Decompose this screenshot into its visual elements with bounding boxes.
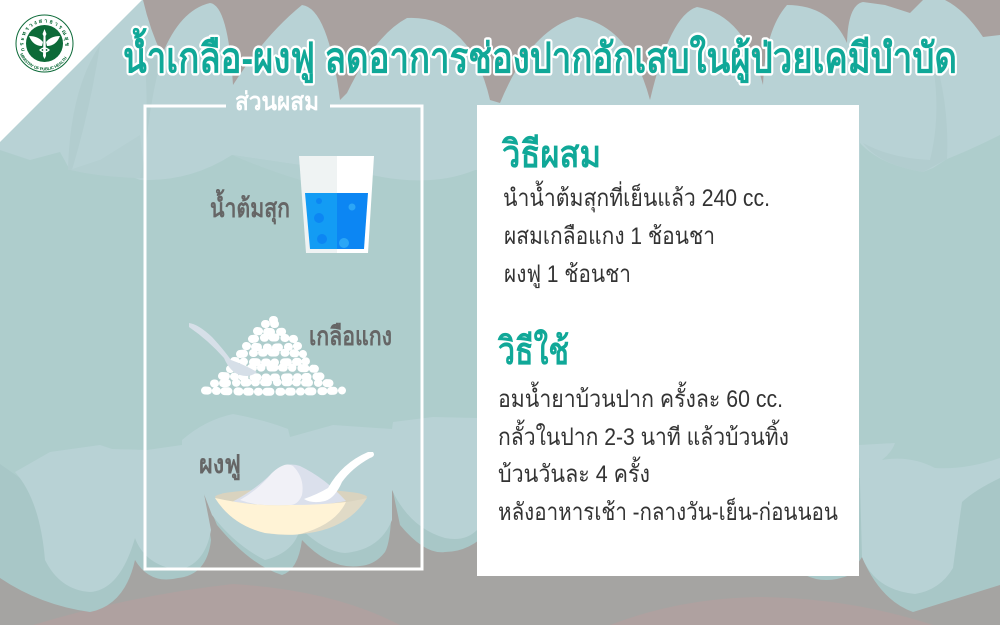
text: usage steps: บ้วนวันละ 4 ครั้ง: [498, 456, 650, 488]
panel: ingredients frame: [145, 106, 422, 569]
text: mixing steps: [503, 180, 770, 289]
background: lower teeth: [15, 414, 1000, 594]
background: tongue: [33, 584, 933, 625]
text: mixing steps: นำน้ำต้มสุกที่เย็นแล้ว 240 cc.: [503, 180, 770, 213]
icon: glass of water: [299, 156, 374, 253]
background: lower gum: [0, 480, 1000, 625]
heading: how to mix: วิธีผสม: [501, 134, 601, 176]
icon: bowl of baking soda with spoon: [215, 452, 374, 535]
text: usage steps: หลังอาหารเช้า -กลางวัน-เย็น-ก่อนนอน: [498, 497, 838, 526]
panel: instructions card: [477, 105, 859, 576]
text: mixing steps: ผงฟู 1 ช้อนชา: [504, 261, 631, 289]
label: table salt: เกลือแกง: [309, 321, 392, 351]
logo: Ministry of Public Health seal: MINISTRY OF PUBLIC HEALTH: [20, 53, 67, 70]
background: upper teeth: [0, 0, 1000, 190]
text: usage steps: กลั้วในปาก 2-3 นาที แล้วบ้วนทิ้ง: [498, 419, 789, 451]
text: usage steps: อมน้ำยาบ้วนปาก ครั้งละ 60 cc.: [498, 381, 783, 413]
label: boiled water: น้ำต้มสุก: [210, 188, 290, 225]
text: usage steps: [498, 381, 838, 526]
logo: Ministry of Public Health seal: [16, 14, 74, 72]
heading: how to use: วิธีใช้: [497, 329, 569, 373]
label: baking soda: ผงฟู: [199, 449, 241, 481]
logo: Ministry of Public Health seal: กระทรวงสาธารณสุข: [20, 19, 69, 52]
corner triangle: [0, 0, 142, 142]
background: upper gum: [0, 0, 1000, 110]
text: mixing steps: ผสมเกลือแกง 1 ช้อนชา: [504, 223, 715, 250]
heading: ingredients: ส่วนผสม: [235, 88, 319, 116]
icon: salt pile with spoon: [189, 320, 342, 392]
background: lower teeth shadow: [0, 464, 1000, 612]
